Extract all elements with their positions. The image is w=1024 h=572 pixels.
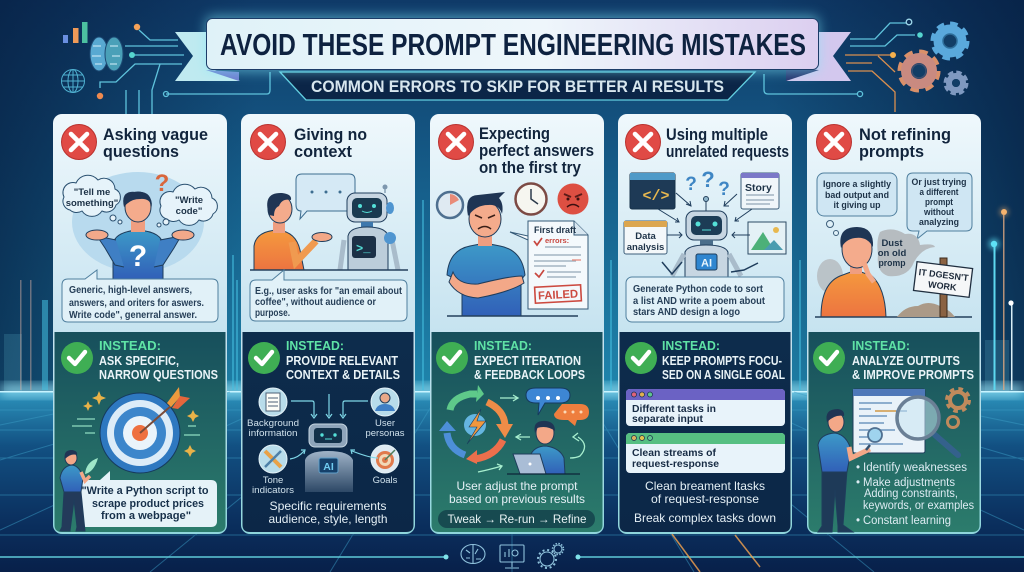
text: audience, style, length <box>268 512 388 526</box>
cloud: write code: "Write <box>175 195 203 206</box>
icon: red x <box>816 124 852 160</box>
window: clean streams: request-response <box>632 458 719 470</box>
heading: Expecting <box>479 124 550 143</box>
heading: perfect answers <box>479 141 594 160</box>
icon: check <box>813 342 845 374</box>
heading: INSTEAD: <box>662 338 720 353</box>
illustration: frustrated person <box>447 192 578 316</box>
speech bubble: ignore: it giving up <box>834 200 881 210</box>
speech bubble: different prompt: prompt <box>925 197 953 207</box>
text: Break complex tasks down <box>634 511 776 525</box>
question marks: ? <box>685 174 697 195</box>
arrows <box>658 193 752 238</box>
heading <box>859 125 951 161</box>
heading: PROVIDE RELEVANT <box>286 353 398 368</box>
cloud: tell me something <box>63 175 122 224</box>
icon: data analysis: analysis <box>627 242 664 253</box>
illustration: robot <box>305 424 353 492</box>
callout: purpose. <box>255 307 290 319</box>
icon: goals: Goals <box>373 475 398 486</box>
illustration: confused person: ? <box>129 240 147 273</box>
heading <box>474 338 585 382</box>
icon: code window <box>630 173 675 209</box>
title: AVOID THESE PROMPT ENGINEERING MISTAKES <box>220 27 806 62</box>
icon: story document: Story <box>745 182 772 194</box>
heading <box>103 125 208 161</box>
speech bubble: different prompt: analyzing <box>919 217 959 227</box>
bullet list: keywords, or examples <box>863 500 974 512</box>
footer icon: brain <box>461 544 485 564</box>
heading: INSTEAD: <box>286 338 344 353</box>
bullet list: Constant learning <box>863 515 951 527</box>
heading: & FEEDBACK LOOPS <box>474 367 585 382</box>
icon: timer <box>437 192 463 218</box>
illustration: confused person: ? <box>155 170 169 197</box>
circuit decoration left <box>97 24 270 114</box>
callout: Write code", generral answer. <box>69 309 197 321</box>
heading: ANALYZE OUTPUTS <box>852 353 960 368</box>
illustration: it doesn't work sign <box>897 258 973 317</box>
speech bubble: different prompt <box>907 173 972 239</box>
question marks: ? <box>701 167 715 192</box>
speech bubble: ignore: Ignore a slightly <box>823 179 891 189</box>
robot: >_ <box>356 242 371 256</box>
arrows <box>290 394 378 459</box>
callout <box>80 471 217 527</box>
icon: bar chart <box>63 22 88 43</box>
heading <box>294 125 367 161</box>
callout: a list AND write a poem about <box>633 295 765 307</box>
icon: red x <box>62 124 96 160</box>
icon: background information: information <box>248 428 298 439</box>
illustration: person and robot <box>250 174 408 270</box>
icon: check <box>625 342 657 374</box>
icon: tone indicators <box>252 445 294 496</box>
panel: mistake 1 <box>53 114 227 534</box>
icon: check <box>248 342 280 374</box>
callout: Generic, high-level answers, <box>69 284 192 296</box>
heading <box>666 125 789 161</box>
callout: E.g., user asks for "an email about <box>255 285 402 297</box>
icon: red x <box>250 124 286 160</box>
icon: user personas: personas <box>366 428 405 439</box>
callout: scrape product prices <box>92 498 204 510</box>
heading: INSTEAD: <box>99 338 161 353</box>
icon: background information: Background <box>247 418 299 429</box>
speech bubble: different prompt: without <box>923 207 954 217</box>
icon: magnifier <box>897 397 958 455</box>
speech bubble: different prompt: Or just trying <box>912 177 966 187</box>
text: of request-response <box>651 492 759 506</box>
bullet list: • <box>856 515 860 527</box>
heading <box>479 124 594 177</box>
bullet list: • <box>856 462 860 474</box>
icon: red x <box>626 124 660 160</box>
text <box>634 479 776 525</box>
question marks <box>685 167 730 200</box>
panel: fix 5 <box>808 332 980 532</box>
bullet list: Adding constraints, <box>864 488 958 500</box>
illustration: failed document: errors: <box>545 236 569 245</box>
icon: clock <box>516 184 546 214</box>
icon: blue gear <box>934 25 966 57</box>
text <box>268 499 388 526</box>
heading: Giving no <box>294 125 367 144</box>
icon: data analysis <box>624 221 667 254</box>
icon: user personas: User <box>375 418 395 429</box>
illustration: person <box>60 450 98 531</box>
speech bubble: ignore: bad output and <box>825 190 889 200</box>
heading: unrelated requests <box>666 142 789 161</box>
icon: user personas <box>366 388 405 439</box>
illustration: overwhelmed robot <box>662 196 758 277</box>
illustration: failed document: FAILED <box>538 288 578 303</box>
heading: ASK SPECIFIC, <box>99 353 179 368</box>
icon: angry face <box>558 184 588 214</box>
cloud: dust: on old <box>878 248 906 259</box>
question marks: ? <box>718 179 730 200</box>
icon: data analysis: Data <box>635 231 657 242</box>
heading: on the first try <box>479 158 581 177</box>
illustration: it doesn't work sign: WORK <box>928 279 958 293</box>
circuit decoration right <box>764 19 923 112</box>
cloud: dust: Dust <box>881 238 903 249</box>
window: clean streams <box>626 433 785 473</box>
heading: Using multiple <box>666 125 768 144</box>
illustration: person <box>818 409 882 532</box>
heading: INSTEAD: <box>852 338 910 353</box>
heading: SED ON A SINGLE GOAL <box>662 367 785 382</box>
heading <box>852 338 974 382</box>
text: Clean breament ltasks <box>645 479 765 493</box>
speech bubble: different prompt: a different <box>920 187 958 197</box>
illustration: iteration loop <box>439 385 513 464</box>
icon: background information <box>247 388 299 439</box>
panel: fix 3 <box>432 332 602 532</box>
cloud: tell me something: something" <box>66 198 118 209</box>
icon: image <box>748 222 786 254</box>
icon: check <box>61 342 93 374</box>
robot <box>340 184 398 270</box>
heading: NARROW QUESTIONS <box>99 367 218 382</box>
illustration: target <box>72 387 200 473</box>
text <box>449 479 585 506</box>
callout: from a webpage" <box>101 510 191 522</box>
illustration: robot: AI <box>323 461 334 473</box>
illustration: output window <box>853 389 925 453</box>
icon: tone indicators: Tone <box>263 475 283 486</box>
text: User adjust the prompt <box>456 479 578 493</box>
heading: EXPECT ITERATION <box>474 353 581 368</box>
icon: code window: </> <box>642 188 670 205</box>
text: Specific requirements <box>270 499 386 513</box>
icon: story document <box>741 173 779 209</box>
callout <box>250 270 407 321</box>
illustration: confused person <box>63 170 217 279</box>
icon: chat bubbles <box>526 388 589 426</box>
title ribbon <box>175 16 851 81</box>
panel: mistake 2 <box>241 114 415 534</box>
window: different tasks: separate input <box>632 413 703 425</box>
icon: brain <box>90 37 123 71</box>
cloud: write code: code" <box>176 206 202 217</box>
bullet list <box>856 462 974 527</box>
callout <box>62 270 218 322</box>
illustration: it doesn't work sign: IT DGESN'T <box>918 267 970 283</box>
panel: fix 2 <box>242 332 414 532</box>
bullet list: Make adjustments <box>863 477 955 489</box>
arrows <box>478 395 585 472</box>
heading <box>99 338 218 382</box>
subtitle banner: COMMON ERRORS TO SKIP FOR BETTER AI RESULTS <box>311 77 724 96</box>
heading <box>662 338 785 382</box>
callout: "Write a Python script to <box>82 485 209 497</box>
panel: mistake 4 <box>618 114 792 534</box>
speech bubble: ignore <box>817 173 897 216</box>
heading <box>286 338 400 382</box>
heading: KEEP PROMPTS FOCU- <box>662 353 782 368</box>
pill: tweak re-run refine: Tweak → Re-run → Refine <box>448 512 587 526</box>
panel: mistake 5 <box>807 114 981 534</box>
footer icon: gears <box>538 544 564 568</box>
cloud: dust <box>877 229 935 276</box>
illustration: overwhelmed robot: AI <box>701 258 712 270</box>
cloud: tell me something: "Tell me <box>74 187 110 198</box>
icon: red x <box>438 124 474 160</box>
icon: goals <box>371 445 399 486</box>
panel: fix 1 <box>54 332 226 532</box>
illustration: thinking person <box>815 220 972 317</box>
icon: orange gear <box>901 53 937 89</box>
heading: INSTEAD: <box>474 338 532 353</box>
text: based on previous results <box>449 492 585 506</box>
footer icon: monitor <box>500 545 524 568</box>
illustration: failed document <box>510 221 588 309</box>
callout <box>626 277 784 322</box>
icon: check <box>436 342 468 374</box>
heading: context <box>294 142 352 161</box>
heading: CONTEXT & DETAILS <box>286 367 400 382</box>
icon: small gear <box>946 73 966 93</box>
icon: globe <box>62 70 84 92</box>
window: different tasks <box>626 389 785 426</box>
callout: answers, and oriters for aswers. <box>69 297 204 309</box>
callout: stars AND design a logo <box>633 306 740 318</box>
icon: gears <box>947 389 969 428</box>
cloud: dust: promp <box>878 258 906 269</box>
illustration: person with laptop <box>507 421 580 474</box>
bullet list: • <box>856 477 860 489</box>
window: different tasks: Different tasks in <box>632 403 716 415</box>
heading: Asking vague <box>103 125 208 144</box>
window: clean streams: Clean streams of <box>632 447 716 459</box>
heading: & IMPROVE PROMPTS <box>852 367 974 382</box>
bullet list: Identify weaknesses <box>863 462 967 474</box>
panel: fix 4 <box>620 332 790 532</box>
cloud: write code <box>157 184 217 227</box>
panel: mistake 3 <box>430 114 604 534</box>
illustration: failed document: First draft <box>534 225 576 235</box>
heading: questions <box>103 142 179 161</box>
heading: prompts <box>859 142 924 161</box>
heading: Not refining <box>859 125 951 144</box>
callout: coffee", without audience or <box>255 296 376 308</box>
icon: tone indicators: indicators <box>252 485 294 496</box>
callout: Generate Python code to sort <box>633 283 763 295</box>
subtitle banner <box>280 72 755 100</box>
